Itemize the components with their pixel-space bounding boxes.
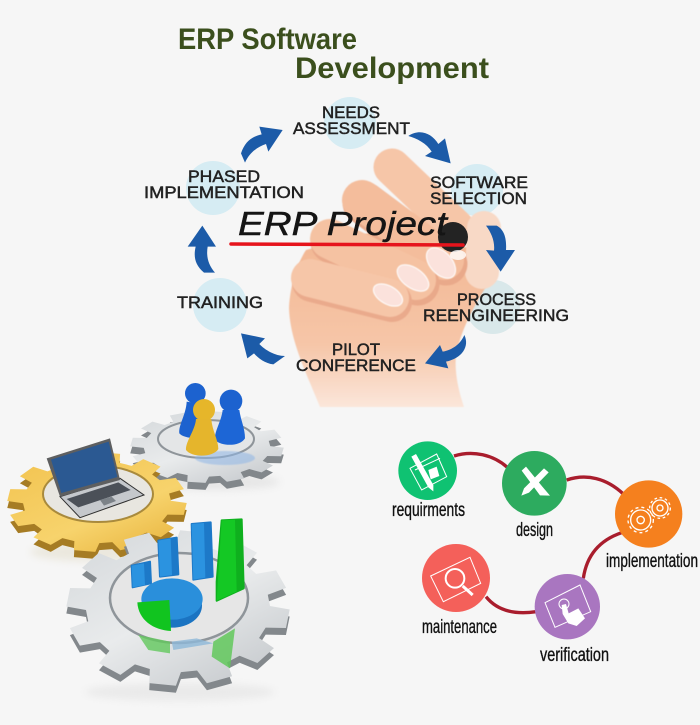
gold gear with laptop: [0, 438, 198, 565]
cycle arrows: [188, 127, 515, 368]
step labels: CONFERENCE: [296, 356, 416, 375]
step labels: NEEDS: [322, 103, 380, 122]
step labels: SOFTWARE: [430, 173, 528, 192]
step: verification: verification: [540, 645, 609, 666]
step labels: TRAINING: [177, 293, 263, 312]
centre label: ERP Project: ERP Project: [238, 205, 449, 242]
step: verification: [535, 574, 609, 666]
fingernails: [370, 242, 461, 311]
step labels: [144, 103, 569, 375]
pawns: [179, 383, 245, 456]
laptop: [47, 438, 144, 518]
title: [178, 23, 489, 85]
step: maintenance: maintenance: [422, 617, 497, 638]
hand holding marker: [289, 167, 490, 407]
title: ERP Software: [178, 23, 357, 56]
panel: ERP project cycle: [144, 97, 569, 407]
step labels: IMPLEMENTATION: [144, 183, 304, 202]
step: design: [502, 451, 567, 541]
panel: software lifecycle: [392, 441, 698, 666]
connectors: [454, 453, 623, 613]
step: implementation: [606, 480, 698, 572]
panel: gears illustration: [0, 383, 303, 702]
step: requirements: requirments: [392, 500, 465, 521]
marker: [438, 222, 468, 252]
step labels: REENGINEERING: [423, 306, 569, 325]
step labels: SELECTION: [430, 189, 527, 208]
step: design: design: [516, 520, 553, 541]
small steel gear with pawns: [121, 383, 293, 494]
step: maintenance: [422, 544, 497, 638]
red underline: [231, 244, 463, 245]
step labels: PILOT: [332, 340, 380, 359]
step labels: PROCESS: [457, 290, 536, 309]
large steel gear with charts: [53, 519, 303, 702]
title: Development: [295, 52, 489, 85]
step circles: [186, 97, 520, 389]
step labels: ASSESSMENT: [293, 119, 410, 138]
step: requirements: [392, 441, 465, 521]
step labels: PHASED: [188, 167, 260, 186]
bar and pie charts: [132, 519, 244, 668]
